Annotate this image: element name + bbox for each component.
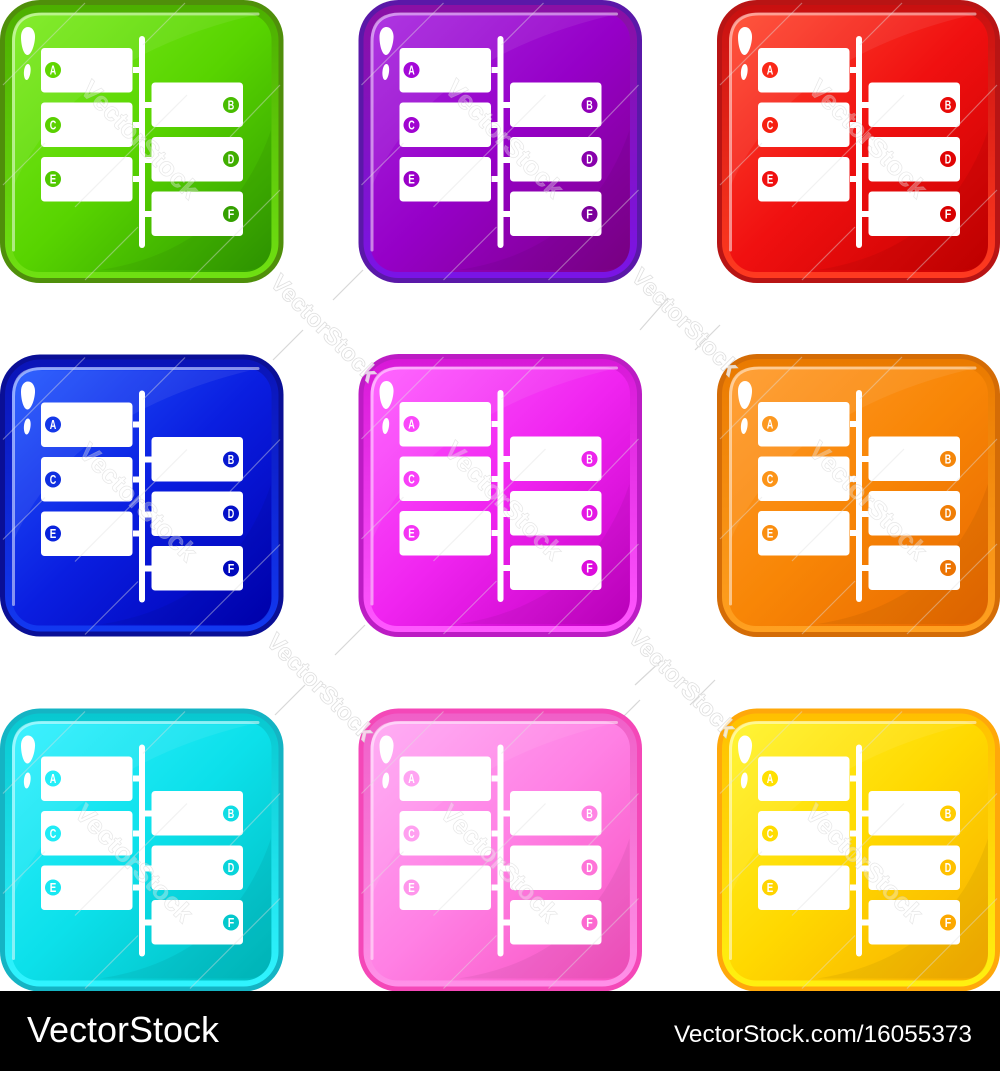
timeline cards A–F: E (408, 880, 415, 895)
timeline axis (850, 744, 869, 956)
timeline cards A–F: C (408, 826, 415, 841)
timeline cards A–F: E (50, 526, 56, 541)
tile frame (0, 708, 284, 992)
timeline cards A–F: B (945, 452, 951, 467)
watermark: VectorStock (69, 798, 200, 929)
watermark text on white gaps (261, 263, 744, 747)
icon: magenta timeline tile (358, 354, 642, 637)
tile frame (358, 0, 642, 283)
footer logo text: VectorStock (27, 1009, 220, 1050)
timeline cards A–F: F (945, 915, 951, 930)
timeline cards A–F (41, 48, 243, 236)
watermark: VectorStock (434, 798, 565, 929)
timeline cards A–F (758, 756, 960, 944)
timeline axis (133, 390, 152, 602)
timeline cards A–F: A (767, 63, 774, 78)
timeline cards A–F (41, 756, 243, 944)
timeline axis (850, 36, 869, 248)
timeline cards A–F: B (228, 452, 234, 467)
gloss highlights (21, 736, 35, 788)
timeline cards A–F: E (50, 172, 56, 187)
timeline cards A–F: D (586, 506, 593, 521)
timeline cards A–F: A (50, 771, 57, 786)
timeline cards A–F: B (945, 98, 951, 113)
timeline cards A–F: A (50, 63, 57, 78)
watermark: VectorStock (439, 73, 570, 204)
timeline cards A–F: D (586, 860, 593, 875)
gloss highlights (738, 736, 752, 788)
watermark: VectorStock (803, 435, 934, 566)
footer image URL: VectorStock.com/16055373 (674, 1021, 972, 1048)
timeline cards A–F: B (945, 806, 951, 821)
timeline cards A–F: A (50, 417, 57, 432)
timeline cards A–F: C (50, 826, 57, 841)
timeline cards A–F (758, 402, 960, 590)
timeline cards A–F: F (945, 207, 951, 222)
icon: green timeline tile (0, 0, 284, 283)
timeline cards A–F: A (767, 417, 774, 432)
tile frame (717, 354, 1000, 637)
watermark text on white gaps: VectorStock (261, 628, 379, 747)
icon: blue timeline tile (0, 354, 284, 636)
gloss highlights (21, 382, 35, 434)
tile frame (717, 0, 1000, 283)
watermark text on white gaps: VectorStock (626, 263, 744, 382)
timeline cards A–F: D (945, 506, 951, 521)
icon: pink timeline tile (358, 708, 642, 992)
timeline cards A–F: E (767, 526, 773, 541)
gloss highlights (738, 381, 752, 434)
timeline cards A–F: C (408, 118, 415, 133)
timeline cards A–F: E (767, 172, 773, 187)
timeline axis (133, 744, 152, 956)
timeline cards A–F: A (767, 771, 774, 786)
watermark: VectorStock (799, 798, 930, 929)
timeline cards A–F: F (586, 561, 593, 576)
icon: cyan timeline tile (0, 708, 284, 992)
timeline cards A–F: E (408, 526, 415, 541)
tile frame (0, 0, 284, 283)
icon: red timeline tile (717, 0, 1000, 283)
timeline cards A–F (400, 48, 602, 236)
timeline axis (850, 390, 869, 602)
timeline cards A–F: E (50, 880, 56, 895)
timeline cards A–F: C (408, 472, 415, 487)
timeline cards A–F: D (586, 152, 593, 167)
timeline cards A–F: F (228, 207, 234, 222)
timeline cards A–F: F (228, 915, 234, 930)
timeline cards A–F: F (228, 561, 234, 576)
timeline cards A–F (400, 402, 602, 590)
timeline cards A–F: E (408, 172, 415, 187)
watermark text on white gaps: VectorStock (265, 269, 383, 388)
timeline cards A–F: D (228, 506, 234, 521)
timeline axis (492, 390, 510, 602)
tile frame (358, 708, 642, 992)
gloss highlights (380, 381, 394, 434)
timeline cards A–F: F (945, 561, 951, 576)
timeline cards A–F: C (50, 472, 57, 487)
timeline cards A–F: F (586, 915, 593, 930)
icon: yellow timeline tile (717, 708, 1000, 992)
timeline cards A–F: B (586, 452, 593, 467)
timeline cards A–F: B (586, 806, 593, 821)
timeline cards A–F: C (50, 118, 57, 133)
timeline cards A–F: D (228, 152, 234, 167)
gloss highlights (380, 27, 394, 80)
timeline cards A–F: E (767, 880, 773, 895)
tile frame (717, 708, 1000, 992)
timeline cards A–F: B (228, 806, 234, 821)
timeline cards A–F: F (586, 207, 593, 222)
timeline cards A–F (400, 756, 602, 944)
timeline cards A–F: D (228, 860, 234, 875)
timeline cards A–F: D (945, 860, 951, 875)
timeline axis (492, 36, 510, 248)
gloss highlights (21, 27, 35, 80)
timeline cards A–F: A (408, 417, 415, 432)
watermark: VectorStock (438, 435, 569, 566)
gloss highlights (380, 736, 394, 788)
watermark streaks on white background (273, 270, 720, 725)
watermark: VectorStock (803, 73, 934, 204)
timeline cards A–F: A (408, 771, 415, 786)
timeline cards A–F: A (408, 63, 415, 78)
timeline cards A–F: C (767, 118, 774, 133)
watermark: VectorStock (75, 74, 206, 205)
tile frame (358, 354, 642, 637)
timeline cards A–F: B (586, 98, 593, 113)
timeline cards A–F (41, 402, 243, 590)
icon: orange timeline tile (717, 354, 1000, 637)
icon: purple timeline tile (358, 0, 642, 283)
footer bar (0, 991, 1000, 1071)
timeline cards A–F (758, 48, 960, 236)
gloss highlights (738, 27, 752, 80)
timeline axis (492, 744, 510, 956)
tile frame (0, 354, 284, 636)
timeline cards A–F: B (228, 98, 234, 113)
timeline axis (133, 36, 152, 248)
timeline cards A–F: C (767, 826, 774, 841)
timeline cards A–F: C (767, 472, 774, 487)
watermark text on white gaps: VectorStock (623, 624, 741, 743)
timeline cards A–F: D (945, 152, 951, 167)
watermark: VectorStock (73, 437, 204, 568)
